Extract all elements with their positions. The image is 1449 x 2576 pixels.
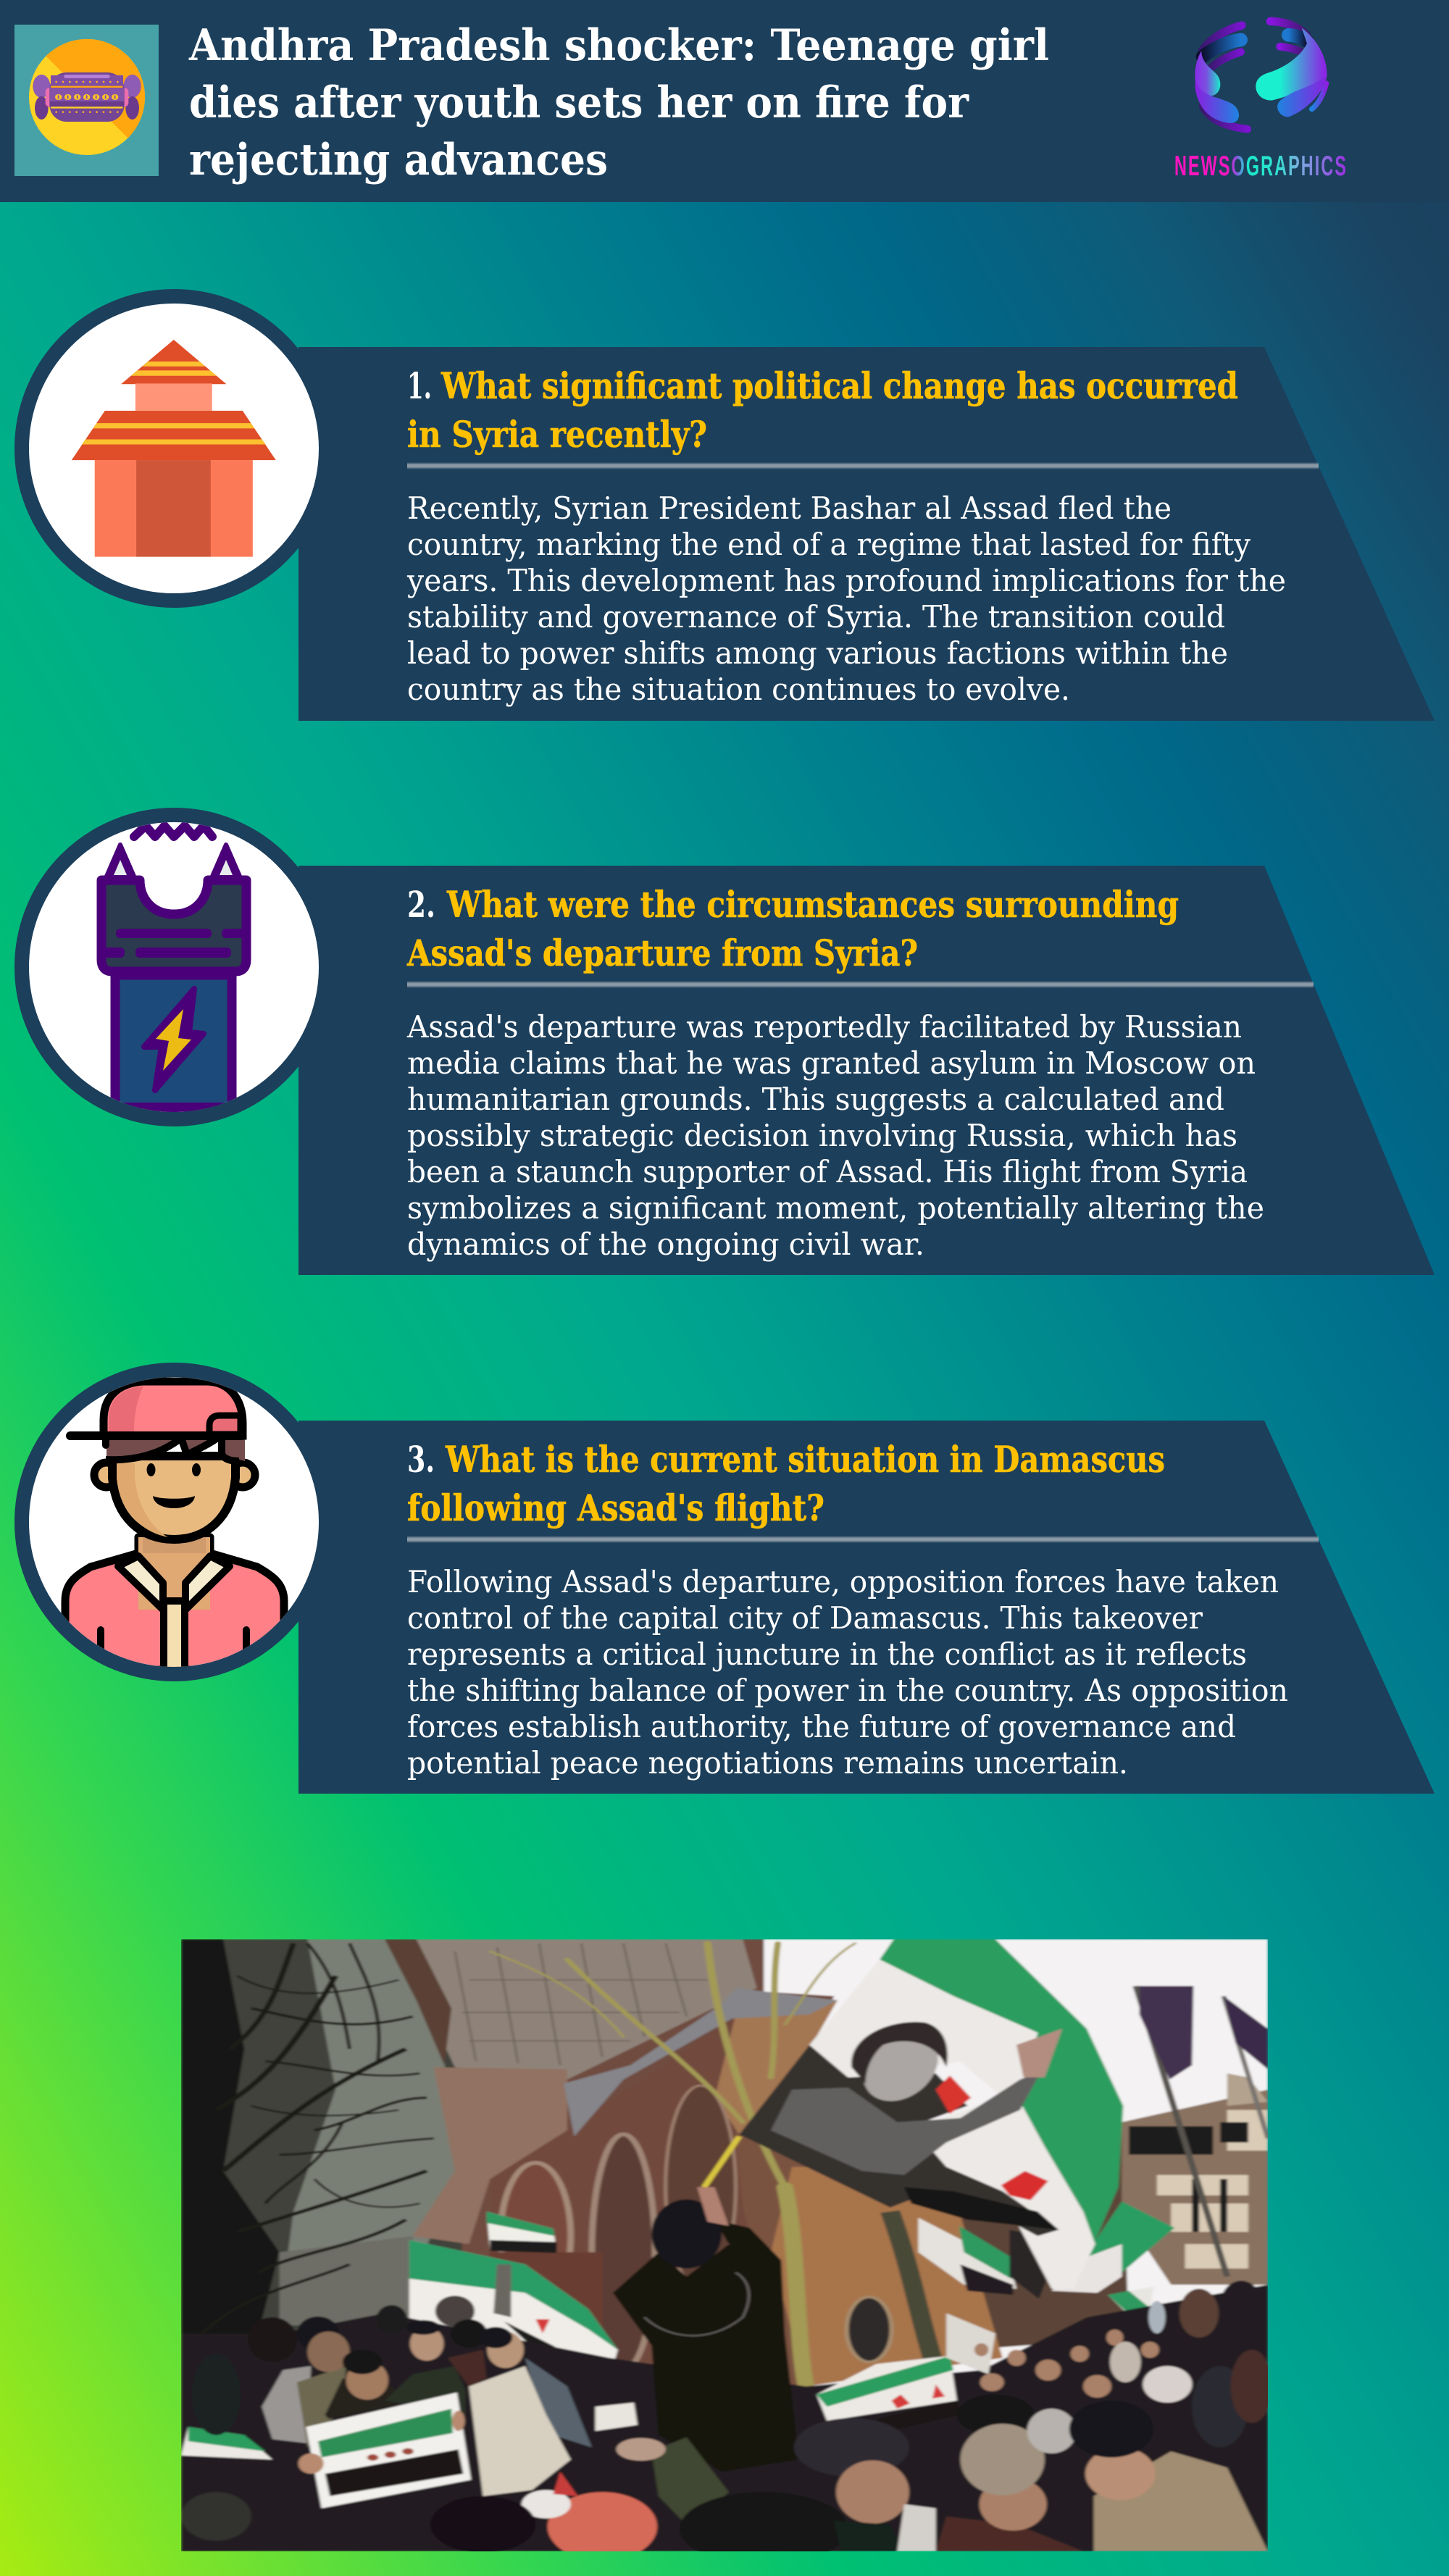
heading 3: following Assad's flight? [407, 1486, 824, 1529]
body text 2: media claims that he was granted asylum in Moscow on [407, 1045, 1256, 1081]
body text 1: country as the situation continues to evolve. [407, 672, 1070, 707]
title: rejecting advances [189, 135, 608, 185]
body text 2: dynamics of the ongoing civil war. [407, 1226, 924, 1262]
body text 2: humanitarian grounds. This suggests a calculated and [407, 1082, 1224, 1117]
logo: newsographics: NEWSOGRAPHICS [1174, 150, 1346, 181]
heading 3: 3. [407, 1438, 435, 1481]
heading 2: What were the circumstances surrounding [446, 883, 1179, 926]
logo: newsographics [1174, 21, 1346, 181]
title [188, 20, 1049, 185]
body text 2: been a staunch supporter of Assad. His flight from Syria [407, 1154, 1248, 1189]
body text 1: years. This development has profound implications for the [406, 563, 1286, 598]
heading 1: What significant political change has occurred [440, 364, 1238, 407]
heading 3 [407, 1438, 1165, 1529]
body text 1 [406, 490, 1286, 707]
body text 3: the shifting balance of power in the country. As opposition [407, 1673, 1288, 1708]
icon 2: stun device [22, 815, 326, 1119]
body text 3: forces establish authority, the future of governance and [407, 1709, 1236, 1744]
body text 3: potential peace negotiations remains uncertain. [407, 1745, 1128, 1781]
heading 1: 1. [407, 364, 432, 407]
panel 3: Damascus [22, 1370, 1435, 1794]
photo: protest crowd with Syrian opposition flags [181, 1939, 1268, 2551]
heading 2 [406, 883, 1179, 974]
body text 3 [407, 1564, 1288, 1781]
body text 3: Following Assad's departure, opposition forces have taken [407, 1564, 1279, 1599]
body text 2: symbolizes a significant moment, potentially altering the [407, 1190, 1264, 1226]
heading 3: What is the current situation in Damascus [445, 1438, 1165, 1481]
heading 1 [407, 364, 1238, 456]
body text 2: Assad's departure was reportedly facilitated by Russian [406, 1009, 1242, 1045]
body text 3: represents a critical juncture in the conflict as it reflects [407, 1636, 1247, 1672]
icon: candy [14, 25, 159, 176]
heading 2: 2. [407, 883, 435, 926]
icon 3: boy with cap [22, 1370, 326, 1674]
body text 1: stability and governance of Syria. The transition could [407, 599, 1225, 635]
header bar [0, 0, 1449, 202]
body text 3: control of the capital city of Damascus. This takeover [407, 1600, 1203, 1636]
title: Andhra Pradesh shocker: Teenage girl [188, 20, 1049, 71]
body text 2 [406, 1009, 1264, 1262]
body text 2: possibly strategic decision involving Russia, which has [407, 1118, 1237, 1153]
title: dies after youth sets her on fire for [189, 78, 969, 128]
body text 1: country, marking the end of a regime that lasted for fifty [407, 527, 1250, 562]
body text 1: Recently, Syrian President Bashar al Assad fled the [407, 490, 1172, 526]
panel 1: political change [22, 296, 1435, 721]
icon 1: building [22, 296, 326, 601]
heading 2: Assad's departure from Syria? [406, 932, 918, 974]
body text 1: lead to power shifts among various factions within the [407, 635, 1228, 671]
panel 2: departure [22, 815, 1435, 1275]
heading 1: in Syria recently? [407, 413, 707, 456]
